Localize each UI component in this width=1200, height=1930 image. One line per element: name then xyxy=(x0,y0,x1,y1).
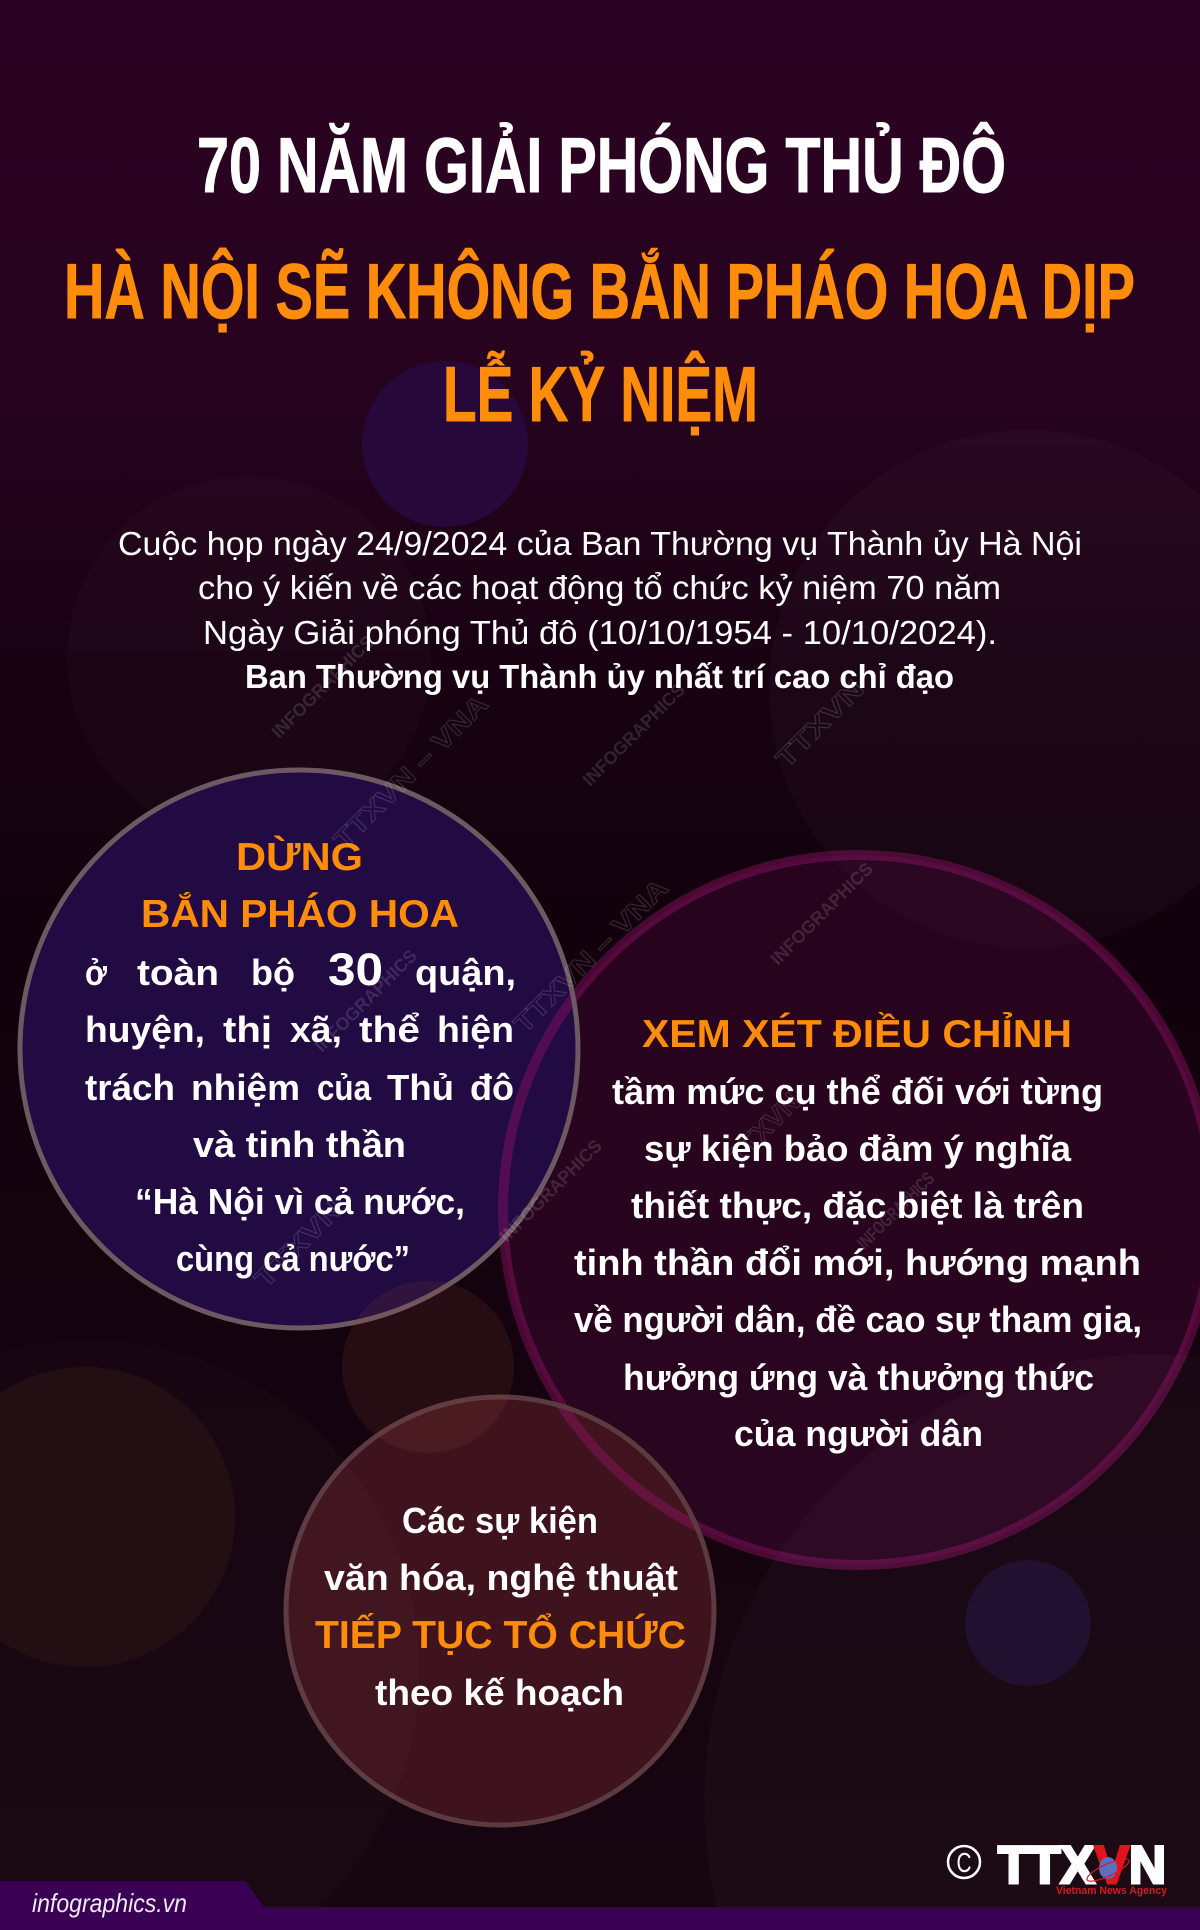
body: stop fireworks: và tinh thần xyxy=(193,1124,406,1165)
watermarks xyxy=(248,632,938,1294)
body: adjust scale: sự kiện bảo đảm ý nghĩa xyxy=(644,1128,1072,1169)
footer site name: infographics.vn xyxy=(32,1888,187,1918)
icon: copyright xyxy=(948,1846,980,1878)
body: stop fireworks xyxy=(85,944,516,1279)
watermarks: TTXVN xyxy=(248,1193,349,1294)
watermarks: INFOGRAPHICS xyxy=(853,1168,938,1253)
body: stop fireworks: “Hà Nội vì cả nước, xyxy=(135,1181,465,1222)
panel ring: stop fireworks circle xyxy=(20,770,578,1328)
icon: globe xyxy=(1085,1855,1131,1885)
heading: stop fireworks: BẮN PHÁO HOA xyxy=(141,892,459,936)
background circles xyxy=(0,361,1200,1686)
text: stop fireworks xyxy=(85,835,516,1279)
body: adjust scale: tinh thần đổi mới, hướng mạnh xyxy=(574,1242,1141,1283)
title line 3: LỄ KỶ NIỆM xyxy=(443,350,758,438)
intro text block: Ban Thường vụ Thành ủy nhất trí cao chỉ đạo xyxy=(245,658,954,695)
overlapping translucent circles xyxy=(0,1281,1200,1930)
panel fill: stop fireworks circle xyxy=(20,770,578,1328)
text: events continue xyxy=(315,1500,686,1713)
body: stop fireworks: thể xyxy=(359,1009,420,1050)
body: stop fireworks: của xyxy=(317,1067,372,1108)
body: stop fireworks: toàn xyxy=(137,952,219,993)
intro text block xyxy=(118,525,1082,695)
body: stop fireworks: quận, xyxy=(415,952,516,993)
watermarks: TTXVN – VNA xyxy=(328,688,494,855)
text: events continue: văn hóa, nghệ thuật xyxy=(324,1557,678,1598)
watermarks: INFOGRAPHICS xyxy=(767,859,877,969)
text: adjust scale xyxy=(574,1012,1142,1454)
panel ring: adjust scale circle xyxy=(503,855,1200,1565)
body: stop fireworks: bộ xyxy=(251,952,295,993)
intro text block: Cuộc họp ngày 24/9/2024 của Ban Thường vụ Thành ủy Hà Nội xyxy=(118,525,1082,562)
panel fill: adjust scale circle xyxy=(503,855,1200,1565)
body: adjust scale: tầm mức cụ thể đối với từng xyxy=(612,1071,1103,1112)
body: stop fireworks: thị xyxy=(223,1009,272,1050)
panel ring: events continue circle xyxy=(286,1397,714,1825)
title xyxy=(64,121,1135,438)
text: events continue: Các sự kiện xyxy=(402,1500,598,1541)
panel fill: events continue circle xyxy=(286,1397,714,1825)
watermarks: INFOGRAPHICS xyxy=(311,946,421,1056)
logo wordmark: TTXVN xyxy=(998,1836,1166,1895)
heading: adjust scale: XEM XÉT ĐIỀU CHỈNH xyxy=(642,1012,1072,1056)
body: adjust scale: của người dân xyxy=(734,1413,983,1454)
body: adjust scale: về người dân, đề cao sự tham gia, xyxy=(574,1299,1142,1340)
watermarks: INFOGRAPHICS xyxy=(496,1136,606,1246)
logo tagline: Vietnam News Agency xyxy=(1056,1885,1168,1897)
icon: copyright: C xyxy=(956,1847,972,1878)
intro text block: Ngày Giải phóng Thủ đô (10/10/1954 - 10/10/2024). xyxy=(203,614,997,651)
intro text block: cho ý kiến về các hoạt động tổ chức kỷ niệm 70 năm xyxy=(198,569,1001,606)
body: stop fireworks: cùng cả nước” xyxy=(176,1238,410,1279)
footer bar xyxy=(0,1881,1200,1930)
body: stop fireworks: đô xyxy=(470,1067,514,1108)
body: adjust scale: thiết thực, đặc biệt là trên xyxy=(631,1185,1084,1226)
watermarks: TTXVN xyxy=(721,1086,806,1171)
body: stop fireworks: xã, xyxy=(290,1009,342,1050)
text: events continue: theo kế hoạch xyxy=(375,1672,624,1713)
watermarks: INFOGRAPHICS xyxy=(268,632,378,742)
watermarks: TTXVN xyxy=(769,673,870,774)
body: stop fireworks: 30 xyxy=(328,944,383,995)
watermarks: INFOGRAPHICS xyxy=(579,680,689,790)
body: stop fireworks: Thủ xyxy=(387,1067,454,1108)
logo: TTXVN xyxy=(948,1836,1168,1897)
body: adjust scale xyxy=(574,1071,1142,1454)
body: stop fireworks: ở xyxy=(85,952,107,993)
body: stop fireworks: huyện, xyxy=(85,1009,205,1050)
body: stop fireworks: hiện xyxy=(437,1009,514,1050)
heading: events continue: TIẾP TỤC TỔ CHỨC xyxy=(315,1612,686,1657)
body: stop fireworks: nhiệm xyxy=(191,1067,300,1108)
body: stop fireworks: trách xyxy=(85,1067,175,1108)
heading: stop fireworks: DỪNG xyxy=(236,835,363,879)
watermarks: TTXVN – VNA xyxy=(508,872,674,1039)
body: adjust scale: hưởng ứng và thưởng thức xyxy=(623,1357,1094,1398)
heading: stop fireworks xyxy=(141,835,459,936)
